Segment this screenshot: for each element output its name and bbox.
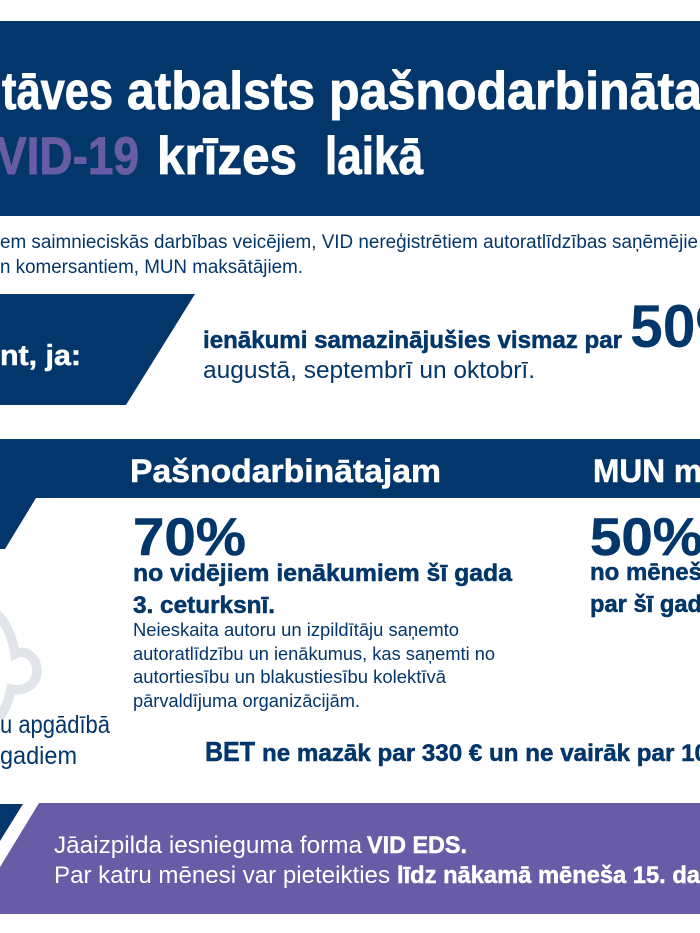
intro text <box>0 232 698 278</box>
corner triangle <box>0 804 23 841</box>
table header band: MUN m <box>593 453 700 489</box>
column note: autortiesību un blakustiesību kolektīvā <box>133 666 447 687</box>
title line 1: tāves <box>2 62 113 121</box>
intro text: n komersantiem, MUN maksātājiem. <box>0 257 303 278</box>
limits line: BET <box>205 736 255 767</box>
title line 2: krīzes <box>157 127 297 186</box>
column: self-employed: 3. ceturksnī. <box>133 592 275 619</box>
column: MUN: 50% <box>590 508 700 567</box>
column: MUN: par šī gad <box>590 591 700 618</box>
column: self-employed: 70% <box>133 508 246 567</box>
intro text: em saimnieciskās darbības veicējiem, VID nereģistrētiem autoratlīdzības saņēmējie <box>0 232 698 253</box>
column note: pārvaldījuma organizācijām. <box>133 690 360 711</box>
application panel <box>0 803 700 914</box>
title line 2: laikā <box>325 127 423 186</box>
application line 2: Par katru mēnesi var pieteikties <box>54 862 390 889</box>
icon: cloud outline <box>0 614 37 718</box>
title line 1: atbalsts <box>127 62 315 121</box>
title line 1 <box>2 62 700 121</box>
condition tag <box>0 294 195 405</box>
condition text: augustā, septembrī un oktobrī. <box>203 357 535 384</box>
column: self-employed: no vidējiem ienākumiem šī gada <box>133 560 513 587</box>
application line 2: līdz nākamā mēneša 15. da <box>397 862 700 889</box>
condition text: ienākumi samazinājušies vismaz par <box>203 327 622 354</box>
column: self-employed <box>133 508 513 711</box>
title line 2 <box>0 127 423 186</box>
dependants label: u apgādībā <box>0 711 110 739</box>
application line 2 <box>54 862 700 889</box>
title line 2: VID-19 <box>0 127 139 186</box>
application line 1: VID EDS. <box>367 832 467 859</box>
column: MUN: no mēneš <box>590 559 700 586</box>
dependants label <box>0 711 110 770</box>
title banner <box>0 21 700 216</box>
table header band: Pašnodarbinātajam <box>130 453 441 489</box>
table header band <box>0 439 700 549</box>
column note <box>133 619 495 711</box>
condition tag: nt, ja: <box>0 340 81 372</box>
limits line: ne mazāk par 330 € un ne vairāk par 10 <box>262 740 700 767</box>
condition text <box>203 293 700 384</box>
application line 1: Jāaizpilda iesnieguma forma <box>54 832 363 859</box>
column note: autoratlīdzību un ienākumus, kas saņemti no <box>133 643 495 664</box>
dependants label: gadiem <box>0 742 77 770</box>
column note: Neieskaita autoru un izpildītāju saņemto <box>133 619 459 640</box>
column: MUN <box>590 508 700 618</box>
